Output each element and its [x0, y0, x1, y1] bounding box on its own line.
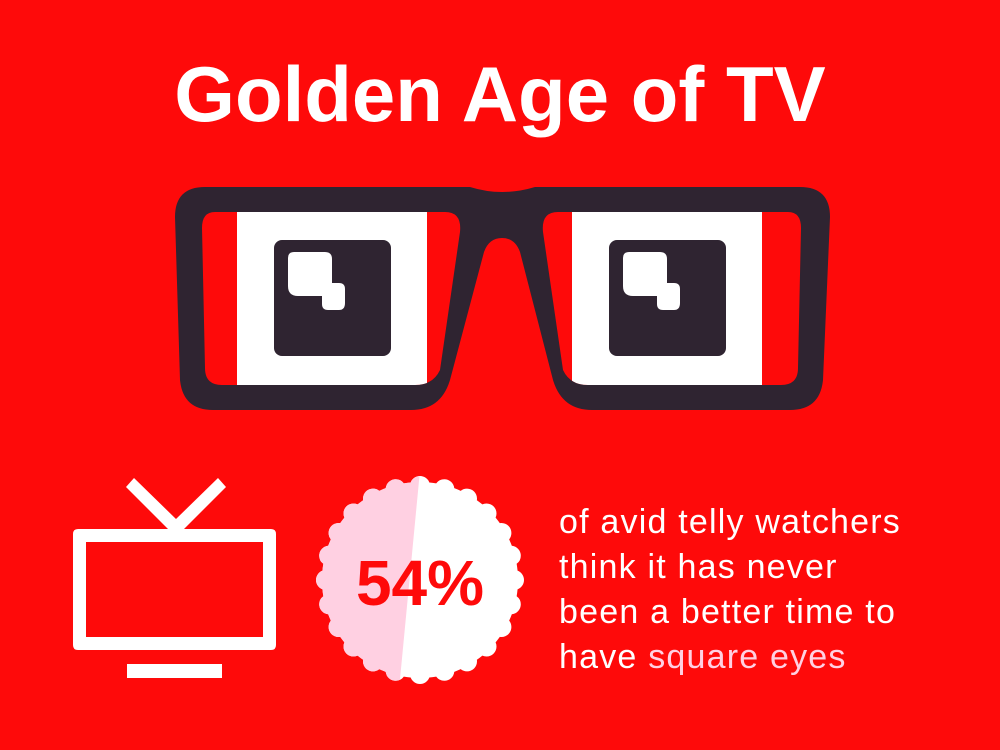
- text block: think it has never: [559, 548, 838, 586]
- right lens: [542, 212, 801, 385]
- glasses: [175, 187, 830, 410]
- icon: tv: [73, 478, 276, 678]
- left lens: [202, 212, 460, 385]
- badge: 54%: 54%: [356, 547, 484, 619]
- text block: have square eyes: [559, 638, 847, 676]
- badge: 54%: [316, 476, 524, 684]
- text block: of avid telly watchers: [559, 503, 901, 541]
- title: Golden Age of TV: [174, 50, 826, 138]
- text block: been a better time to: [559, 593, 896, 631]
- text block: [559, 503, 901, 676]
